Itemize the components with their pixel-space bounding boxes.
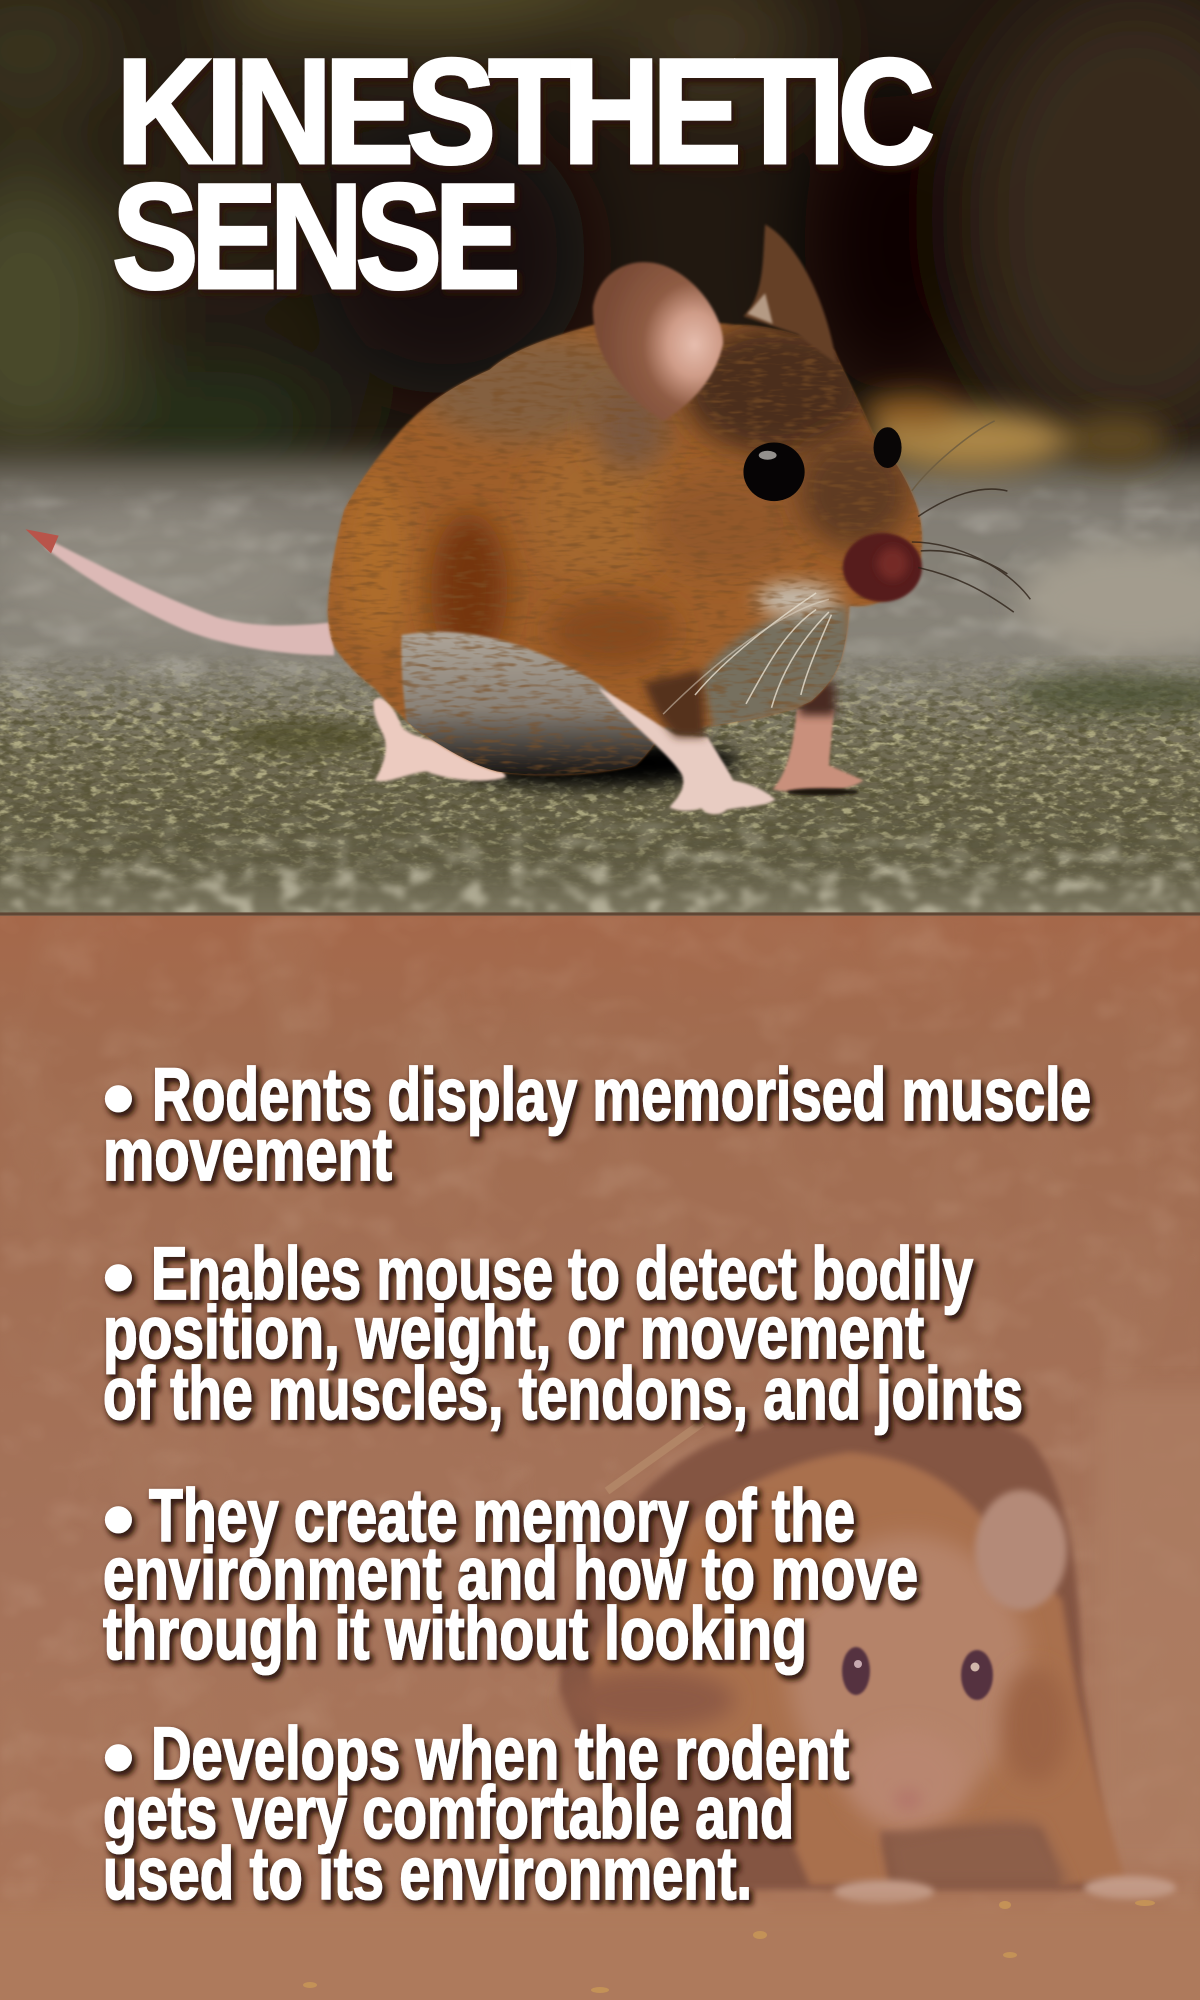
- bullet 1: [103, 1048, 1091, 1196]
- photo: mouse on stone ledge: [0, 0, 1200, 950]
- whiskers: [663, 421, 1030, 714]
- bullet 2: [103, 1227, 1023, 1435]
- bullet 4: used to its environment.: [103, 1832, 752, 1915]
- chest cavity: [885, 1821, 1070, 1885]
- tail: [26, 529, 334, 655]
- bullet 3: through it without looking: [103, 1592, 807, 1675]
- blurred yellow leaf: [861, 393, 1167, 471]
- bullet 3: environment and how to move: [103, 1532, 918, 1615]
- bullet 2: position, weight, or movement: [103, 1291, 924, 1374]
- bullet 3: [103, 1469, 918, 1675]
- bullet 4: [103, 1707, 849, 1915]
- dark blurred background: [0, 0, 1200, 473]
- bullet 1: movement: [103, 1113, 392, 1196]
- faded mouse body: [590, 1452, 1125, 1885]
- hole twig: [607, 1423, 702, 1491]
- bullet 3: They create memory of the: [149, 1474, 855, 1557]
- floor: [0, 1900, 1200, 2000]
- title: SENSE: [112, 152, 516, 320]
- faded mouse ear: [975, 1490, 1067, 1610]
- eyes: [743, 427, 902, 501]
- back foot: [373, 698, 506, 781]
- bullet 4: Develops when the rodent: [151, 1712, 849, 1795]
- bullet list: [103, 1048, 1091, 1915]
- left ear: [593, 262, 723, 421]
- title: KINESTHETIC: [116, 27, 932, 195]
- title: [112, 27, 932, 320]
- mouse hole: [560, 1412, 1110, 1890]
- shadow under mouse: [446, 738, 740, 787]
- right ear: [743, 224, 837, 363]
- faded mouse: [565, 1452, 1176, 1904]
- panel: brown tinted wall photo: [0, 916, 1200, 2000]
- nose: [843, 533, 922, 602]
- bullet 2: •: [103, 1227, 134, 1326]
- mouse body: [319, 306, 931, 784]
- near front leg and paw: [598, 669, 775, 814]
- bullet 1: •: [103, 1048, 134, 1147]
- faded mouse eyes: [842, 1647, 993, 1700]
- faded mouse nose: [894, 1788, 922, 1812]
- bullet 4: •: [103, 1707, 134, 1806]
- far front leg: [773, 682, 863, 796]
- faded mouse paws: [834, 1876, 1176, 1904]
- right wall lighter: [1095, 1390, 1200, 1870]
- bullet 4: gets very comfortable and: [103, 1771, 794, 1854]
- bullet 3: •: [103, 1469, 134, 1568]
- stone ledge with speckled surface: [0, 453, 1200, 950]
